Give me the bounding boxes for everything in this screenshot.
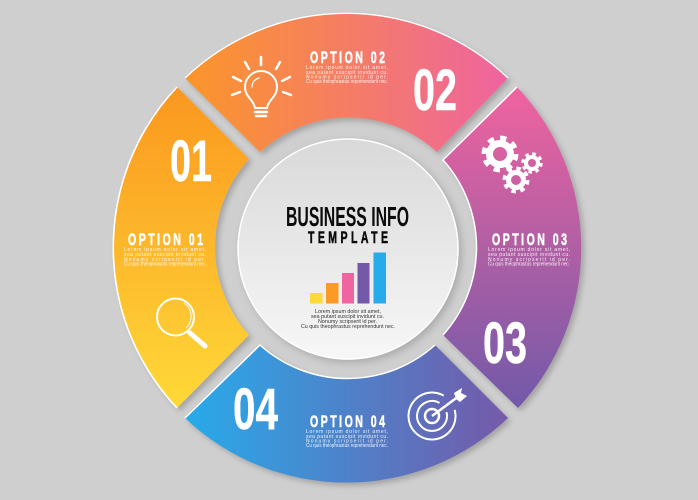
center circle	[238, 139, 458, 359]
text: option 03 body: Cu quis theophrastus reprehendunt nec.	[488, 262, 570, 268]
text: option 03 body: Lorem ipsum dolor sit amet,	[488, 247, 570, 253]
text: option 04 body	[306, 429, 388, 449]
text: center body: Cu quis theophrastus reprehendunt nec.	[301, 324, 395, 330]
icon: gears	[484, 138, 541, 192]
text: option 01 body: sea putant suscipit invidunt cu.	[124, 252, 206, 258]
text: option 01 body: Nonumy scripserit id per.	[124, 257, 206, 263]
text: center body	[301, 309, 395, 330]
text: option 04 body: sea putant suscipit invidunt cu.	[306, 434, 388, 440]
heading: option 03: OPTION 03	[492, 229, 567, 249]
text: center body: sea putant suscipit invidunt cu.	[311, 314, 384, 320]
text: option 02 body	[306, 65, 388, 85]
bar chart	[310, 252, 386, 304]
panel: option 03	[443, 87, 581, 408]
heading: option 02: OPTION 02	[310, 47, 385, 67]
heading: option 01: OPTION 01	[128, 229, 203, 249]
number 04: 04	[233, 377, 278, 442]
text: option 04 body: Lorem ipsum dolor sit amet,	[306, 429, 388, 435]
text: option 02 body: Cu quis theophrastus reprehendunt nec.	[306, 79, 388, 85]
panel: option 02	[185, 13, 508, 152]
text: center body: Nonumy scripserit id per.	[318, 319, 377, 325]
icon: light bulb	[232, 57, 291, 116]
panel: option 04	[185, 345, 508, 483]
text: option 03 body: Nonumy scripserit id per.	[488, 257, 570, 263]
number 02: 02	[413, 58, 457, 123]
text: option 02 body: sea putant suscipit invidunt cu.	[306, 70, 388, 76]
text: option 01 body: Cu quis theophrastus reprehendunt nec.	[124, 262, 206, 268]
heading: template: TEMPLATE	[308, 227, 388, 247]
text: option 01 body	[124, 247, 206, 268]
icon: target	[409, 388, 467, 440]
number 01: 01	[170, 129, 212, 194]
icon: magnifier	[157, 298, 205, 346]
text: option 04 body: Cu quis theophrastus reprehendunt nec.	[306, 443, 388, 449]
text: center body: Lorem ipsum dolor sit amet,	[315, 309, 381, 315]
number 03: 03	[483, 311, 527, 376]
heading: option 04: OPTION 04	[310, 411, 385, 431]
text: option 03 body: sea putant suscipit invidunt cu.	[488, 252, 570, 258]
heading: business info: BUSINESS INFO	[286, 201, 409, 232]
text: option 03 body	[488, 247, 570, 268]
panel: option 01	[113, 87, 249, 408]
text: option 02 body: Nonumy scripserit id per.	[306, 74, 388, 80]
text: option 04 body: Nonumy scripserit id per.	[306, 438, 388, 444]
text: option 02 body: Lorem ipsum dolor sit amet,	[306, 65, 388, 71]
text: option 01 body: Lorem ipsum dolor sit amet,	[124, 247, 206, 253]
